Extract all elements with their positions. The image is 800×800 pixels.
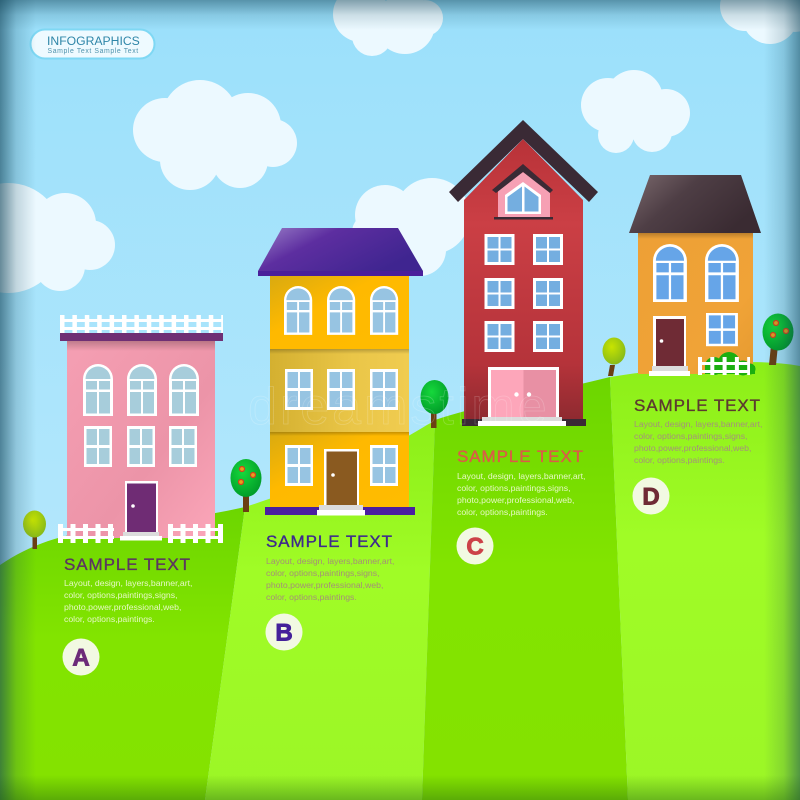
text block D: color, options,paintings. bbox=[634, 455, 725, 465]
text block D bbox=[634, 396, 762, 465]
roof bbox=[258, 228, 423, 271]
building B: yellow house bbox=[258, 228, 423, 516]
tree: lime tree D bbox=[602, 338, 626, 376]
steps bbox=[649, 366, 690, 376]
text block D: color, options,paintings,signs, bbox=[634, 431, 748, 441]
base band bbox=[265, 507, 415, 515]
text block C bbox=[457, 447, 585, 517]
text block B: color, options,paintings,signs, bbox=[266, 568, 380, 578]
text block D: SAMPLE TEXT bbox=[634, 396, 761, 415]
door bbox=[125, 481, 158, 533]
text block A: photo,power,professional,web, bbox=[64, 602, 181, 612]
text block A: color, options,paintings. bbox=[64, 614, 155, 624]
right fence bbox=[168, 528, 224, 539]
text block C: color, options,paintings,signs, bbox=[457, 483, 570, 493]
text block D: Layout, design, layers,banner,art, bbox=[634, 419, 762, 429]
cloud left bbox=[0, 183, 115, 293]
door bbox=[488, 367, 559, 419]
text block B: color, options,paintings. bbox=[266, 592, 357, 602]
door bbox=[653, 316, 686, 368]
title badge bbox=[30, 30, 154, 58]
text block C: Layout, design, layers,banner,art, bbox=[457, 471, 585, 481]
left fence bbox=[58, 528, 114, 539]
cloud upper left bbox=[133, 80, 297, 190]
text block A: Layout, design, layers,banner,art, bbox=[64, 578, 192, 588]
roof bbox=[449, 120, 598, 202]
tree: orange tree D bbox=[762, 314, 794, 365]
hill ground bbox=[0, 362, 800, 800]
rooftop railing bbox=[60, 319, 223, 330]
cloud top centre bbox=[333, 0, 443, 56]
building A: pink house bbox=[58, 319, 224, 540]
text block B: photo,power,professional,web, bbox=[266, 580, 383, 590]
base band bbox=[462, 419, 586, 426]
title badge: Sample Text Sample Text bbox=[48, 48, 139, 55]
text block C: photo,power,professional,web, bbox=[457, 495, 574, 505]
cloud behind red house bbox=[352, 178, 470, 276]
steps bbox=[478, 417, 566, 426]
badge A: A bbox=[72, 644, 90, 672]
dormer bbox=[492, 164, 553, 220]
tree: lime tree A bbox=[23, 510, 46, 549]
badge C: C bbox=[466, 534, 484, 560]
badge D: D bbox=[642, 484, 660, 510]
text block B bbox=[266, 532, 394, 602]
text block A: SAMPLE TEXT bbox=[64, 555, 191, 574]
text block C: SAMPLE TEXT bbox=[457, 447, 584, 466]
title badge: INFOGRAPHICS bbox=[47, 34, 140, 48]
building D: orange house bbox=[629, 175, 761, 376]
badge C bbox=[456, 528, 494, 564]
fence bbox=[698, 362, 750, 373]
text block B: Layout, design, layers,banner,art, bbox=[266, 556, 394, 566]
door bbox=[324, 449, 359, 506]
cornice bbox=[60, 333, 223, 341]
tree: green tree C bbox=[420, 380, 448, 428]
cloud upper right bbox=[581, 70, 690, 153]
text block B: SAMPLE TEXT bbox=[266, 532, 393, 551]
steps bbox=[317, 505, 365, 516]
steps bbox=[120, 532, 162, 540]
text block A bbox=[64, 555, 192, 624]
watermark: dreamstime bbox=[248, 378, 550, 436]
badge D bbox=[632, 478, 670, 514]
bush bbox=[705, 352, 756, 376]
roof bbox=[629, 175, 761, 233]
text block D: photo,power,professional,web, bbox=[634, 443, 751, 453]
tree: orange tree B bbox=[230, 459, 262, 512]
text block C: color, options,paintings. bbox=[457, 507, 548, 517]
badge B bbox=[266, 614, 302, 650]
cloud top right bbox=[720, 0, 800, 44]
building C: red house bbox=[449, 120, 598, 426]
badge A bbox=[62, 638, 100, 676]
badge B: B bbox=[275, 620, 293, 646]
text block A: color, options,paintings,signs, bbox=[64, 590, 178, 600]
